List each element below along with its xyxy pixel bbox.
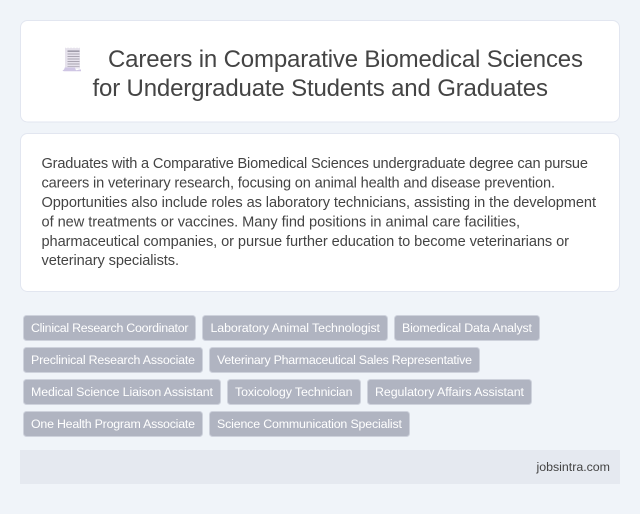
tag: Toxicology Technician <box>228 380 360 404</box>
title: for Undergraduate Students and Graduates <box>92 75 548 102</box>
tag: Laboratory Animal Technologist: Laboratory Animal Technologist <box>210 321 381 335</box>
description text: pharmaceutical companies, or pursue further education to become veterinarians or <box>42 234 569 250</box>
tag: Medical Science Liaison Assistant: Medical Science Liaison Assistant <box>31 385 214 399</box>
tag: Medical Science Liaison Assistant <box>24 380 220 404</box>
panel: title header <box>20 20 620 122</box>
description text: careers in veterinary research, focusing on animal health and disease prevention. <box>42 176 555 192</box>
tag: Science Communication Specialist: Science Communication Specialist <box>217 417 403 431</box>
tag: Regulatory Affairs Assistant <box>368 380 532 404</box>
description text <box>42 156 596 269</box>
panel: description <box>20 134 620 292</box>
tag: Clinical Research Coordinator: Clinical Research Coordinator <box>31 321 188 335</box>
title: Careers in Comparative Biomedical Sciences <box>108 46 583 73</box>
tag: Laboratory Animal Technologist <box>202 316 388 340</box>
tag: Toxicology Technician: Toxicology Technician <box>235 385 353 399</box>
tag: One Health Program Associate: One Health Program Associate <box>31 417 195 431</box>
tag: Clinical Research Coordinator <box>24 316 196 340</box>
tag: Science Communication Specialist <box>210 412 410 436</box>
career tags <box>24 316 540 436</box>
description text: Opportunities also include roles as laboratory technicians, assisting in the development <box>42 195 596 211</box>
tag: Preclinical Research Associate <box>24 348 202 372</box>
tag: Biomedical Data Analyst: Biomedical Data Analyst <box>402 321 533 335</box>
description text: Graduates with a Comparative Biomedical Sciences undergraduate degree can pursue <box>42 156 588 172</box>
tag: Preclinical Research Associate: Preclinical Research Associate <box>31 353 195 367</box>
tag: Biomedical Data Analyst <box>394 316 540 340</box>
description text: veterinary specialists. <box>42 253 179 269</box>
tag: Regulatory Affairs Assistant: Regulatory Affairs Assistant <box>375 385 525 399</box>
description text: of new treatments or vaccines. Many find positions in animal care facilities, <box>42 214 520 230</box>
footer bar <box>20 450 620 484</box>
tag: One Health Program Associate <box>24 412 202 436</box>
tag: Veterinary Pharmaceutical Sales Representative: Veterinary Pharmaceutical Sales Representative <box>217 353 472 367</box>
footer source text: jobsintra.com <box>536 460 610 474</box>
title <box>92 46 583 102</box>
tag: Veterinary Pharmaceutical Sales Representative <box>210 348 480 372</box>
icon: paper scroll <box>62 48 81 71</box>
